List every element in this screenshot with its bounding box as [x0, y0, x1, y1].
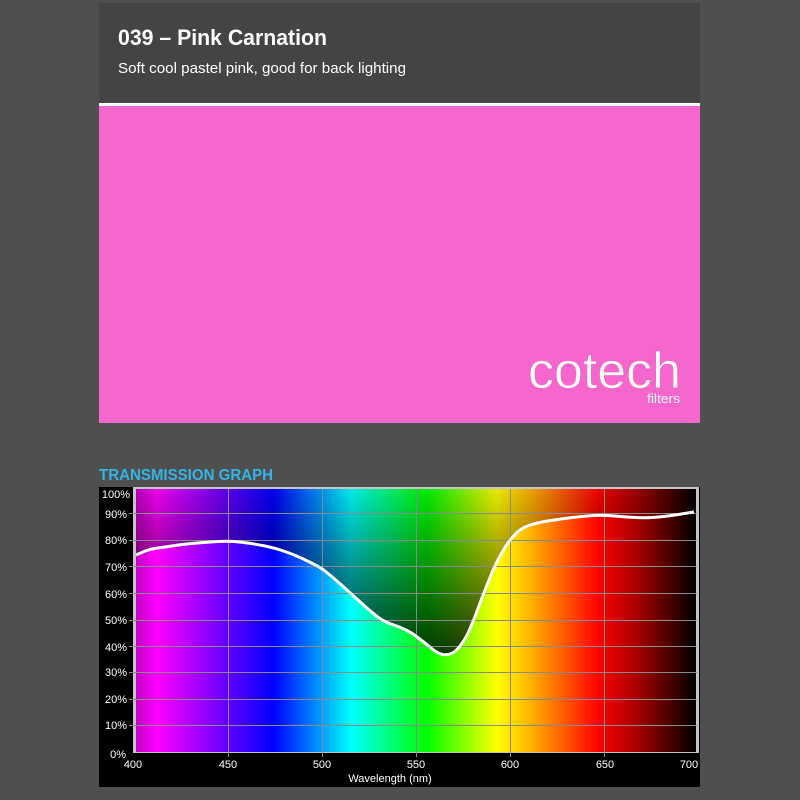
y axis labels: 0%: [110, 749, 126, 761]
logo: cotech filters: cotech: [528, 342, 681, 399]
plot frame: [133, 487, 699, 753]
y axis labels: 20%: [105, 694, 127, 706]
x axis labels: [124, 759, 698, 771]
visible spectrum gradient: [136, 489, 696, 752]
y axis labels: 50%: [105, 615, 127, 627]
y axis labels: 10%: [105, 720, 127, 732]
x axis title: Wavelength (nm): [348, 773, 432, 785]
x axis labels: 400: [124, 759, 142, 771]
grid lines: [129, 489, 697, 757]
x axis labels: 500: [313, 759, 331, 771]
colour swatch panel: [99, 106, 700, 423]
y axis labels: 30%: [105, 667, 127, 679]
y axis labels: 60%: [105, 589, 127, 601]
header divider: [99, 103, 700, 106]
subtitle: Soft cool pastel pink, good for back lighting: [118, 60, 406, 77]
y axis labels: 100%: [102, 489, 130, 501]
x axis labels: 600: [501, 759, 519, 771]
title: 039 – Pink Carnation: [118, 25, 327, 50]
y axis labels: 40%: [105, 642, 127, 654]
y axis labels: [102, 489, 130, 761]
x axis labels: 700: [680, 759, 698, 771]
transmission chart: [99, 487, 700, 787]
logo: cotech filters: filters: [647, 391, 681, 406]
y axis labels: 80%: [105, 535, 127, 547]
transmission curve: [136, 512, 694, 655]
x axis labels: 650: [596, 759, 614, 771]
y axis labels: 70%: [105, 562, 127, 574]
header panel: [99, 3, 700, 103]
x axis labels: 450: [219, 759, 237, 771]
section heading: transmission graph: TRANSMISSION GRAPH: [99, 467, 273, 484]
y axis labels: 90%: [105, 509, 127, 521]
absorbed region above curve: [136, 489, 696, 655]
x axis labels: 550: [407, 759, 425, 771]
